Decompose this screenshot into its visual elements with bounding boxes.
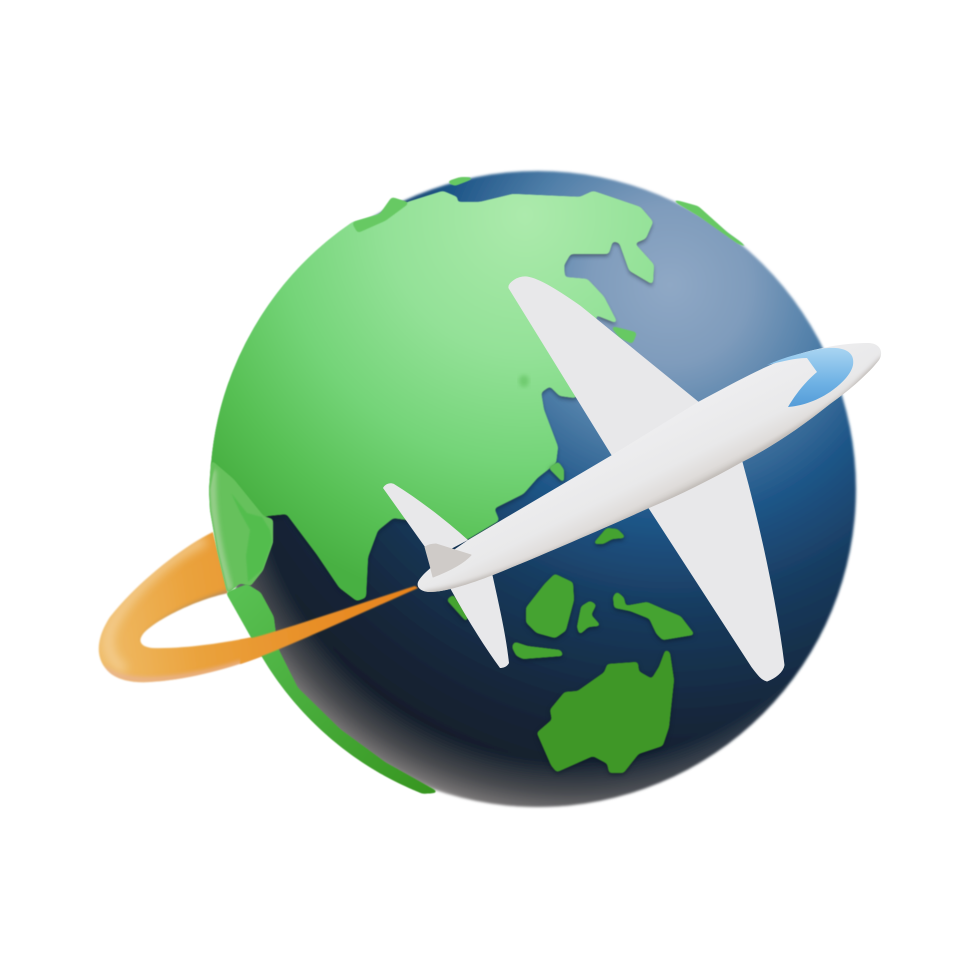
- fuselage: [418, 343, 884, 594]
- continent: Australia: [538, 651, 673, 772]
- globe ocean sphere: [220, 171, 856, 807]
- tail fin lower: [450, 573, 509, 668]
- continent: Indonesia islands: [448, 463, 693, 658]
- continent: Asia: [212, 192, 653, 600]
- island: Sumatra: [448, 596, 467, 620]
- island: Philippines: [595, 529, 624, 543]
- island: coastal islet: [550, 463, 563, 481]
- tail stabilizer: [425, 544, 471, 577]
- orange flight ring, back loop: [98, 531, 262, 684]
- orange flight trail, front part: [240, 586, 418, 664]
- lower wing: [649, 462, 784, 681]
- island: New Guinea: [614, 593, 693, 639]
- island: Sulawesi: [578, 602, 599, 633]
- cockpit window: [767, 348, 853, 407]
- crater detail on coast: [519, 375, 529, 387]
- continent: left lobe with rim light: [210, 462, 272, 592]
- illustration: globe with airplane: [98, 169, 881, 809]
- upper wing: [509, 277, 698, 455]
- island: Java: [513, 643, 562, 658]
- lobe shading: [213, 470, 272, 590]
- tail fin upper: [383, 483, 468, 560]
- airplane: [383, 277, 884, 681]
- continent: lower coast strip: [227, 585, 437, 793]
- shadow of Asia on ocean: [282, 222, 656, 548]
- continent: northern rim islands: [353, 178, 748, 343]
- island: Borneo: [527, 575, 573, 637]
